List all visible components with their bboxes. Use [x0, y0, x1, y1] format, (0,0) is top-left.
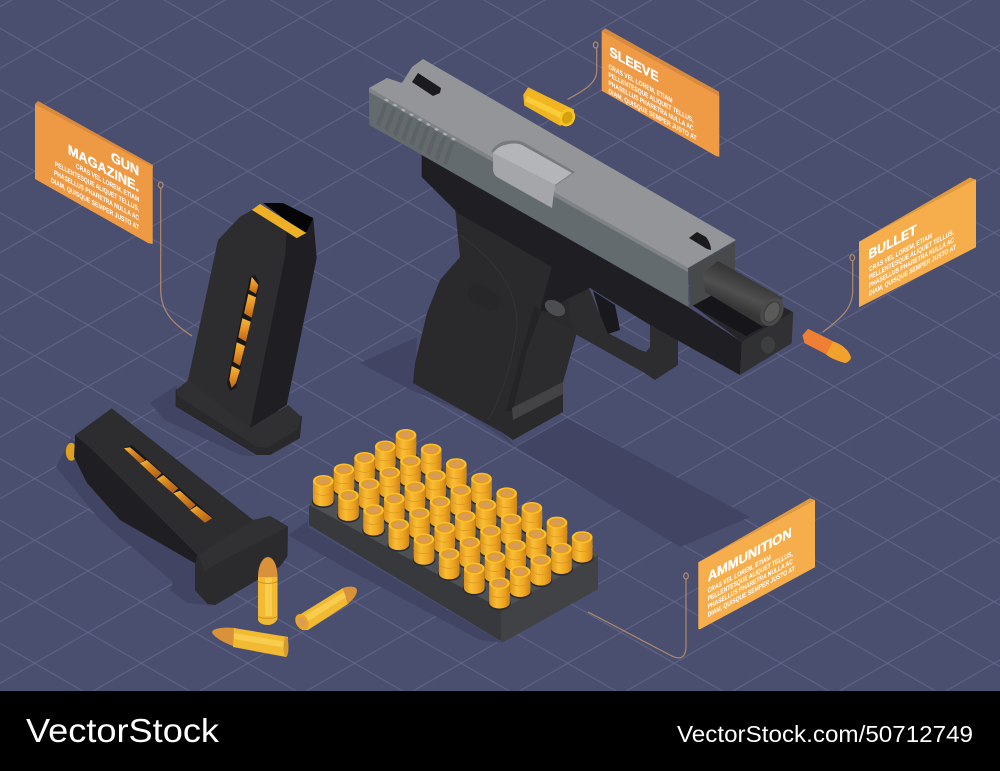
card text: DIAM, QUISQUE SEMPER JUSTO AT [869, 242, 956, 298]
spent sleeve [524, 88, 578, 129]
grip contour line [460, 235, 517, 420]
ejection port outline [491, 140, 575, 186]
card text: CRAS VEL LOREM, ETIAM [608, 62, 672, 105]
recoil opening [693, 295, 763, 336]
slide side [369, 88, 688, 307]
cartridges [312, 429, 594, 610]
card: ammunition [698, 498, 815, 629]
card text: PHASELLUS PHARETRA NULLA AC [54, 168, 139, 223]
card text: PHASELLUS PHARETRA NULLA AC [869, 235, 954, 290]
footer url: VectorStock.com/50712749 [677, 721, 973, 747]
rear sight [412, 73, 441, 96]
card text: DIAM, QUISQUE SEMPER JUSTO AT [708, 564, 795, 619]
feed lips opening [263, 203, 313, 233]
trigger [593, 291, 620, 334]
visible rounds [124, 447, 212, 523]
card text [51, 117, 139, 232]
leader line: ammunition [588, 573, 688, 658]
grip [413, 170, 577, 440]
grip front strap [513, 313, 577, 410]
magazine right face [250, 218, 317, 428]
leader line: gun magazine [158, 182, 192, 336]
frame nose front [740, 312, 793, 375]
card text: PELLENTESQUE ALIQUET TELLUS, [869, 227, 954, 282]
card text: BULLET [868, 222, 917, 263]
card text: PHASELLUS PHARETRA NULLA AC [708, 557, 793, 611]
leader line: sleeve [568, 42, 598, 100]
lying magazine [66, 408, 288, 604]
body side [74, 435, 198, 564]
card text: CRAS VEL LOREM, ETIAM [869, 231, 932, 274]
footer bar [0, 691, 1000, 771]
card text: PHASELLUS PHARETRA NULLA AC [608, 78, 694, 133]
card text: PELLENTESQUE ALIQUET TELLUS, [708, 549, 793, 603]
base plate [196, 517, 287, 604]
top cartridge [252, 204, 307, 238]
tray top [312, 453, 596, 607]
tray side right [503, 556, 596, 640]
frame [422, 155, 742, 375]
slide front face [688, 242, 735, 307]
slide lock lever [542, 296, 568, 320]
loose bullet: upright [258, 557, 278, 625]
tray side left [311, 507, 503, 640]
card: gun magazine [35, 101, 153, 244]
barrel [703, 261, 783, 326]
card text [868, 201, 956, 298]
grip front groove [506, 305, 541, 412]
card: sleeve [602, 28, 719, 157]
magazine front face [188, 210, 287, 428]
upright magazine [176, 203, 317, 454]
card text: SLEEVE [610, 44, 659, 86]
frame nose top [692, 282, 793, 342]
slide top [369, 59, 736, 268]
front sight [689, 232, 711, 250]
ejection port top [493, 144, 572, 185]
card text: CRAS VEL LOREM, ETIAM [76, 161, 139, 204]
card: bullet [859, 178, 976, 307]
card text: CRAS VEL LOREM, ETIAM [708, 553, 771, 595]
card text: AMMUNITION [708, 525, 792, 586]
card text: GUN [111, 150, 139, 180]
orange bullet near muzzle [804, 330, 851, 363]
base plate top [178, 381, 300, 447]
card text [608, 44, 697, 143]
shadows on the floor [56, 337, 750, 643]
grip base pad [512, 382, 563, 420]
card text [708, 523, 795, 619]
rear cartridge tip [66, 443, 77, 461]
cartridge tray [311, 429, 596, 640]
base plate bevel [198, 516, 288, 572]
card text: PELLENTESQUE ALIQUET TELLUS, [608, 70, 694, 124]
card text: MAGAZINE. [68, 142, 139, 196]
leader line: bullet [823, 255, 855, 332]
rear serrations [376, 98, 456, 165]
loose bullet: lying left [212, 628, 288, 657]
window slot [227, 275, 259, 391]
muzzle [756, 294, 788, 330]
visible rounds [229, 277, 258, 388]
body top [75, 408, 253, 555]
window slot [124, 445, 213, 523]
pistol [369, 59, 793, 440]
thumb indent [464, 281, 503, 314]
trigger guard [568, 280, 678, 380]
card text: DIAM, QUISQUE SEMPER JUSTO AT [51, 176, 139, 232]
base plate side [176, 390, 301, 454]
slide top edge [369, 88, 688, 272]
guide rod [761, 336, 775, 354]
loose bullet: lying right [293, 587, 357, 632]
card text: PELLENTESQUE ALIQUET TELLUS, [55, 159, 139, 213]
card text: DIAM, QUISQUE SEMPER JUSTO AT [608, 87, 697, 143]
footer logo: VectorStock [26, 712, 220, 749]
ejection port side [493, 153, 555, 208]
